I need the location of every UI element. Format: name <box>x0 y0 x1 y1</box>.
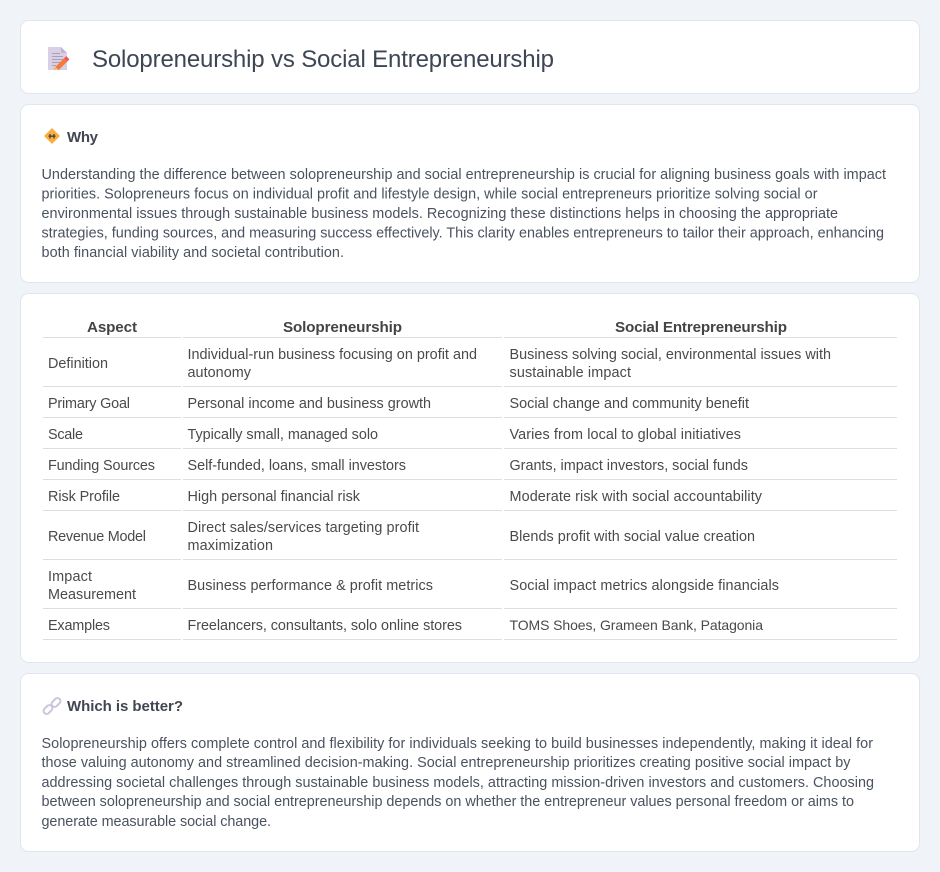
row: risk profile: Risk Profile <box>48 489 120 505</box>
row: definition: autonomy <box>188 365 252 381</box>
row: revenue model <box>48 520 755 554</box>
table header row: Social Entrepreneurship <box>615 319 787 336</box>
row: funding sources: Funding Sources <box>48 458 155 474</box>
row: scale: Typically small, managed solo <box>188 427 378 443</box>
row: examples: Examples <box>48 618 110 634</box>
text block: which is better paragraph <box>42 736 874 830</box>
text block: why paragraph: strategies, funding sources, and measuring success effectively. This clarity enables entrepreneurs to tailor their approach, enhancing <box>42 226 884 242</box>
row: funding sources: Self-funded, loans, small investors <box>188 458 406 474</box>
row: definition <box>48 347 831 381</box>
icon: chain link <box>42 697 62 715</box>
text block: why paragraph: Understanding the difference between solopreneurship and social entrepreneurship is crucial for aligning business goals with impact <box>42 167 886 183</box>
row: funding sources <box>48 458 748 474</box>
row: definition: sustainable impact <box>510 365 631 381</box>
text block: why paragraph <box>42 167 886 261</box>
row: revenue model: maximization <box>188 538 273 554</box>
row: primary goal: Social change and community benefit <box>510 396 749 412</box>
text block: which is better paragraph: generate measurable social change. <box>42 814 271 830</box>
text block: why paragraph: environmental issues through sustainable business models. Recognizing these distinctions helps in choosing the appropriate <box>42 206 838 222</box>
panel: header <box>20 20 920 94</box>
text block: which is better paragraph: between solopreneurship and social entrepreneurship depends on whether the entrepreneur values personal freedom or aims to <box>42 794 854 810</box>
row: risk profile <box>48 489 763 505</box>
row: impact measurement: Business performance & profit metrics <box>188 578 433 594</box>
table header row: Aspect <box>87 319 137 336</box>
row: impact measurement <box>48 569 779 603</box>
text block: why paragraph: both financial viability and societal contribution. <box>42 245 344 261</box>
table header row: Solopreneurship <box>283 319 402 336</box>
row: risk profile: High personal financial risk <box>188 489 361 505</box>
heading: why: Why <box>67 129 99 146</box>
row: impact measurement: Measurement <box>48 587 136 603</box>
row: impact measurement: Social impact metrics alongside financials <box>510 578 779 594</box>
row: impact measurement: Impact <box>48 569 92 585</box>
row: primary goal <box>48 396 749 412</box>
panel: which is better <box>20 674 920 852</box>
row: examples <box>48 617 763 634</box>
row: scale <box>48 427 741 443</box>
icon: document with pencil <box>48 47 68 70</box>
text block: why paragraph: priorities. Solopreneurs focus on individual profit and lifestyle design, while social entrepreneurs prioritize solving social or <box>42 186 818 202</box>
row: primary goal: Personal income and business growth <box>188 396 431 412</box>
row: scale: Varies from local to global initiatives <box>510 427 741 443</box>
text block: which is better paragraph: addressing societal challenges through sustainable business models, attracting mission-driven investors and customers. Choosing <box>42 775 874 791</box>
title: Solopreneurship vs Social Entrepreneurship <box>92 46 554 73</box>
row: revenue model: Direct sales/services targeting profit <box>188 520 419 536</box>
panel: comparison table <box>20 294 920 662</box>
row: definition: Business solving social, environmental issues with <box>510 347 831 363</box>
row: definition: Individual-run business focusing on profit and <box>188 347 477 363</box>
row: scale: Scale <box>48 427 83 443</box>
row: definition: Definition <box>48 356 108 372</box>
row: primary goal: Primary Goal <box>48 396 130 412</box>
table header row <box>87 319 787 336</box>
row: examples: Freelancers, consultants, solo online stores <box>188 618 462 634</box>
panel: why <box>20 104 920 282</box>
text block: which is better paragraph: Solopreneurship offers complete control and flexibility for individuals seeking to build businesses independently, making it ideal for <box>42 736 873 752</box>
icon: orange diamond <box>44 128 60 144</box>
row: examples: TOMS Shoes, Grameen Bank, Patagonia <box>510 617 763 633</box>
row: funding sources: Grants, impact investors, social funds <box>510 458 748 474</box>
text block: which is better paragraph: those valuing autonomy and streamlined decision-making. Social entrepreneurship prioritizes creating positive social impact by <box>42 755 851 771</box>
row: revenue model: Blends profit with social value creation <box>510 529 755 545</box>
heading: which is better: Which is better? <box>67 698 183 715</box>
row: revenue model: Revenue Model <box>48 529 146 545</box>
row: risk profile: Moderate risk with social accountability <box>510 489 763 505</box>
